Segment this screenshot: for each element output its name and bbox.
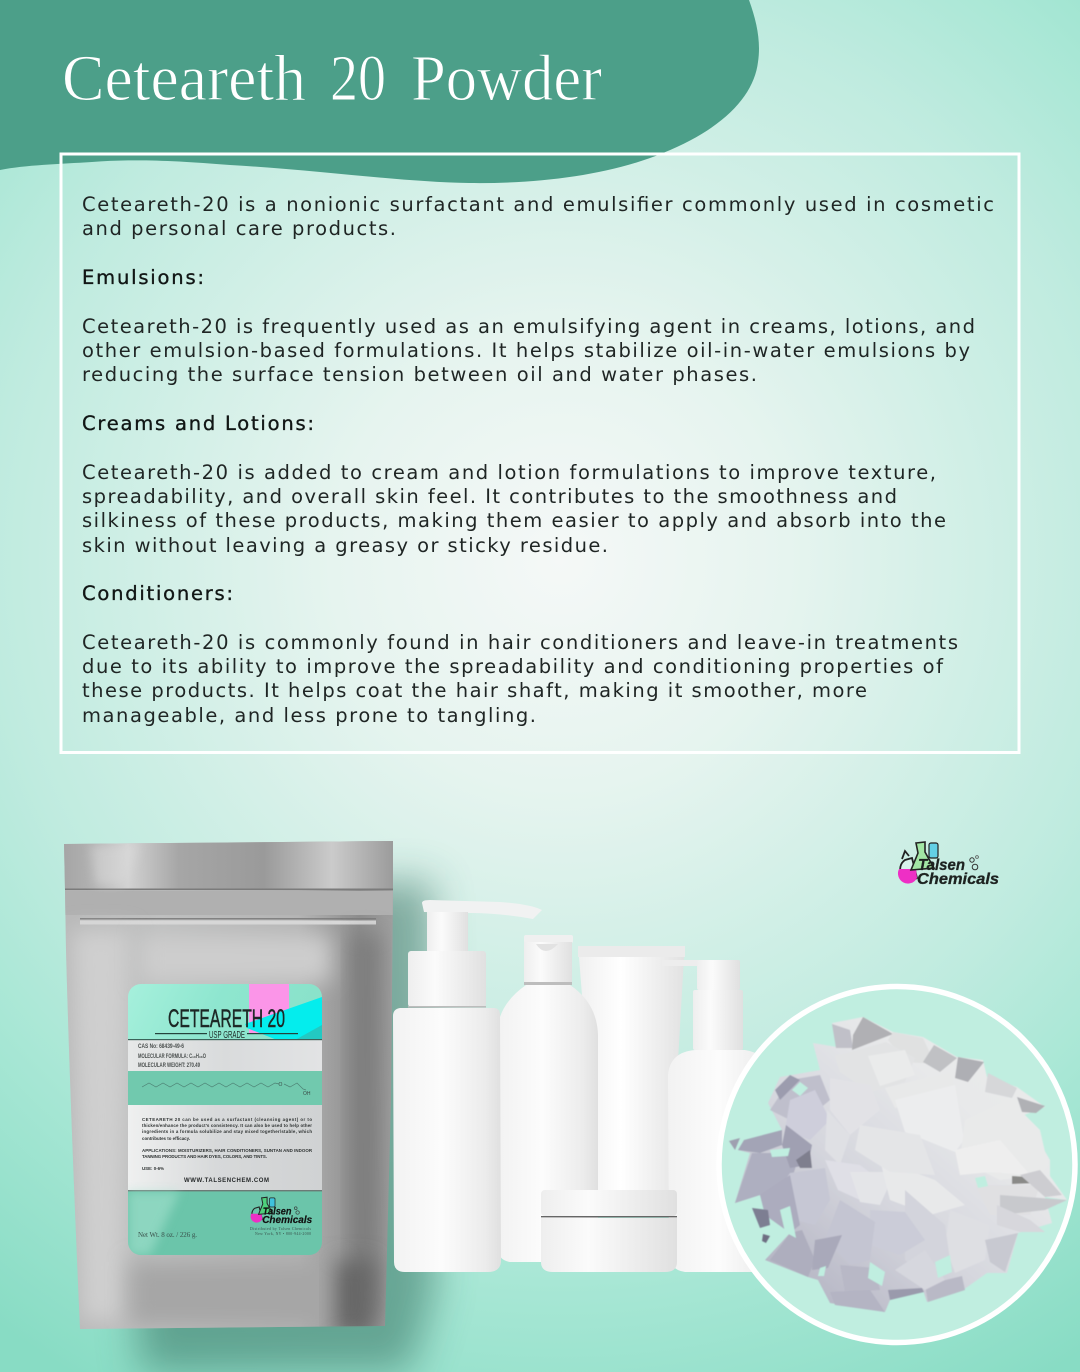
heading: creams and lotions: Creams and Lotions: <box>82 412 314 435</box>
label logo: Chemicals <box>262 1215 313 1226</box>
label website: WWW.TALSENCHEM.COM <box>184 1178 269 1184</box>
text: emulsions: reducing the surface tension between oil and water phases. <box>82 363 757 386</box>
molecule diagram <box>142 1082 311 1097</box>
title: 20 <box>330 42 386 115</box>
text: conditioners <box>82 631 958 727</box>
cream jar <box>541 1190 677 1272</box>
label title: CETEARETH 20 <box>168 1005 285 1033</box>
cosmetic bottles <box>393 900 780 1272</box>
text: conditioners: these products. It helps coat the hair shaft, making it smoother, more <box>82 679 867 702</box>
label distributor <box>250 1227 312 1237</box>
label description: CETEARETH 20 can be used as a surfactant (cleansing agent) or to <box>142 1117 312 1122</box>
label grade: USP GRADE <box>209 1029 245 1041</box>
text: creams and lotions: spreadability, and overall skin feel. It contributes to the smoothness and <box>82 485 897 508</box>
label logo <box>251 1197 313 1226</box>
label description: USE: 0-6% <box>142 1166 164 1171</box>
intro text <box>82 193 994 240</box>
label specs: MOLECULAR FORMULA: C₁₈H₃₈O <box>138 1054 206 1060</box>
text: emulsions: other emulsion-based formulations. It helps stabilize oil-in-water emulsions by <box>82 339 970 362</box>
text: creams and lotions: skin without leaving a greasy or sticky residue. <box>82 534 608 557</box>
logo: Talsen Chemicals: Chemicals <box>917 871 999 888</box>
logo: Talsen Chemicals <box>898 842 999 888</box>
flip-cap bottle <box>497 935 598 1262</box>
zip band <box>60 840 400 889</box>
title <box>62 42 602 115</box>
text: conditioners: Ceteareth-20 is commonly found in hair conditioners and leave-in treatments <box>82 631 958 654</box>
text: creams and lotions: silkiness of these products, making them easier to apply and absorb into the <box>82 509 946 532</box>
label description: contributes to efficacy. <box>142 1136 190 1141</box>
label distributor: New York, NY • 800-944-2000 <box>255 1232 311 1237</box>
label distributor: Distributed by Talsen Chemicals <box>250 1227 312 1231</box>
text: conditioners: due to its ability to improve the spreadability and conditioning properties of <box>82 655 944 678</box>
label specs: CAS No: 68439-49-6 <box>138 1044 185 1050</box>
text: creams and lotions: Ceteareth-20 is added to cream and lotion formulations to improve texture, <box>82 461 936 484</box>
intro text: Ceteareth-20 is a nonionic surfactant and emulsifier commonly used in cosmetic <box>82 193 994 216</box>
text: conditioners: manageable, and less prone to tangling. <box>82 704 536 727</box>
tube <box>578 946 685 1200</box>
flake pile <box>729 1017 1067 1312</box>
text: emulsions: Ceteareth-20 is frequently used as an emulsifying agent in creams, lotions, and <box>82 315 975 338</box>
intro text: and personal care products. <box>82 217 396 240</box>
label specs <box>138 1044 206 1069</box>
pouch shadow <box>110 880 435 1372</box>
label specs: MOLECULAR WEIGHT: 270.49 <box>138 1063 200 1069</box>
molecule diagram: OH <box>303 1091 311 1097</box>
label description: TANNING PRODUCTS AND HAIR DYES, COLORS, AND TINTS. <box>142 1154 267 1159</box>
label description: APPLICATIONS: MOISTURIZERS, HAIR CONDITIONERS, SUNTAN AND INDOOR <box>142 1148 313 1153</box>
title: Ceteareth <box>62 42 306 115</box>
label description <box>142 1117 313 1171</box>
panel: description <box>61 154 1019 752</box>
heading: emulsions: Emulsions: <box>82 266 204 289</box>
label logo: Talsen <box>263 1206 292 1217</box>
molecule diagram: O <box>278 1082 282 1088</box>
product pouch <box>60 840 400 1335</box>
product label <box>128 984 322 1255</box>
heading: conditioners: Conditioners: <box>82 582 233 605</box>
label description: ingredients in a formula solubilize and stay mixed together/stable, which <box>142 1129 312 1134</box>
title: Powder <box>411 42 602 115</box>
pump bottle left <box>393 900 542 1272</box>
text: creams and lotions <box>82 461 946 557</box>
logo: Talsen Chemicals: Talsen <box>918 857 965 874</box>
label net weight: Net Wt. 8 oz. / 226 g. <box>138 1231 197 1239</box>
label description: thicken/enhance the product's consistency. It can also be used to help other <box>142 1123 312 1128</box>
circle inset: flakes <box>719 986 1075 1342</box>
text: emulsions <box>82 315 975 386</box>
header blob <box>0 0 759 183</box>
pump bottle right <box>662 960 780 1272</box>
